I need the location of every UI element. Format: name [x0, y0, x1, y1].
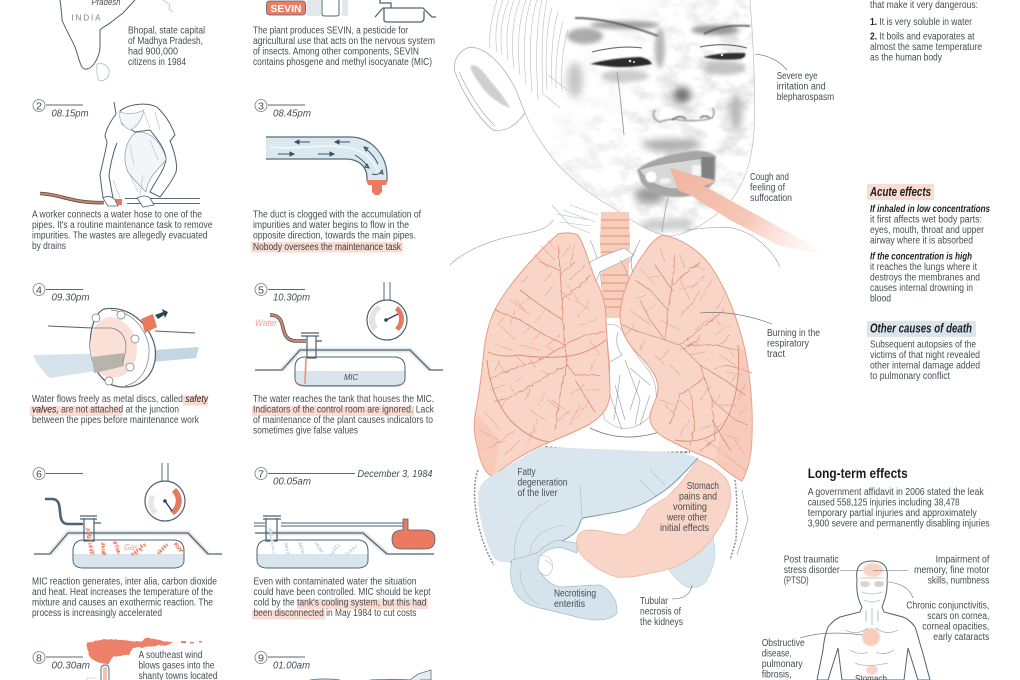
- step marker 9: 9: [258, 654, 264, 664]
- step marker 9: 01.00am: [273, 660, 310, 672]
- text: step 6: MIC reaction generates, inter alia, carbon dioxide: [32, 576, 217, 588]
- label: tubular necrosis: Tubular: [640, 596, 669, 607]
- text: high concentration: causes internal drowning in: [870, 283, 973, 294]
- text: step 5: sometimes give false values: [253, 426, 358, 436]
- text: SEVIN: of insects. Among other components, SEVIN: [253, 46, 419, 58]
- text: step 2: [32, 210, 213, 252]
- illustration: right lung (image left): [474, 233, 610, 476]
- illustration: liver: degeneration: [518, 478, 568, 488]
- text: MIC properties: almost the same temperature: [870, 42, 982, 53]
- text: high concentration: If the concentration is high: [870, 252, 972, 263]
- illustration: body outline: [310, 670, 431, 680]
- text: high concentration: blood: [870, 294, 891, 304]
- text: step 6: mixture and causes an exothermic reaction. The: [32, 598, 213, 608]
- illustration: gauge rising: [145, 463, 185, 521]
- arrow: air inhaled into the mouth: [670, 168, 830, 255]
- text: Bhopal: citizens in 1984: [128, 57, 186, 68]
- text: step 4: [30, 394, 209, 426]
- panel: step 5: [252, 282, 443, 436]
- text: affidavit: caused 558,125 injuries including 38,478: [808, 498, 960, 508]
- text: step 7: been disconnected in May 1984 to cut costs: [254, 608, 416, 619]
- illustration: child's face: [454, 0, 760, 240]
- illustration: MIC tank with water: [255, 315, 443, 386]
- panel: long-term effects: [762, 466, 990, 680]
- label: cough: [750, 172, 792, 204]
- text: MIC properties: as the human body: [870, 52, 942, 64]
- text: step 7: could have been controlled. MIC should be kept: [254, 587, 431, 598]
- text: low concentrations: If inhaled in low concentrations: [870, 204, 990, 215]
- text: Bhopal: [128, 26, 205, 68]
- step marker 7: 00.05am: [273, 476, 311, 488]
- text: step 8: A southeast wind: [138, 650, 202, 661]
- step marker 8: 00.30am: [52, 660, 90, 672]
- text: step 2: impurities. The wastes are allegedly evacuated: [32, 230, 208, 242]
- text: low concentrations: [870, 204, 990, 246]
- text: MIC properties: [870, 0, 982, 64]
- label: burning in the respiratory tract: [700, 312, 820, 360]
- text: affidavit: temporary partial injuries and approximately: [808, 508, 977, 519]
- text: SEVIN: The plant produces SEVIN, a pesticide for: [253, 26, 409, 36]
- illustration: heart: [590, 324, 665, 437]
- label: PTSD: stress disorder: [784, 565, 840, 576]
- text: step 6: process is increasingly accelerated: [32, 608, 162, 619]
- label: eye irritation: [755, 54, 834, 103]
- label: conjunctivitis: early cataracts: [933, 632, 989, 643]
- illustration: stomach: pains and: [679, 492, 717, 502]
- text: SEVIN: [253, 26, 435, 68]
- icon: SEVIN label: SEVIN: [270, 4, 302, 15]
- illustration: stomach: Stomach: [687, 481, 719, 492]
- text: step 3: The duct is clogged with the accumulation of: [253, 210, 421, 220]
- text: high concentration: destroys the membranes and: [870, 272, 980, 284]
- text: low concentrations: eyes, mouth, throat and upper: [870, 225, 985, 236]
- step marker 7: 7: [258, 470, 264, 480]
- illustration: gas cloud and chimney: [87, 638, 202, 680]
- text: step 4: valves, are not attached at the junction: [32, 404, 179, 416]
- step marker 4: [33, 284, 90, 304]
- text: step 4: between the pipes before maintenance work: [32, 415, 200, 426]
- text: Bhopal: of Madhya Pradesh,: [128, 36, 203, 47]
- label: obstructive disease: Obstructive: [762, 638, 805, 649]
- nose and mouth: [637, 108, 716, 232]
- plant tanks: [307, 0, 436, 22]
- text: low concentrations: it first affects wet body parts:: [870, 214, 982, 226]
- map of India: INDIA: [72, 14, 101, 22]
- step marker 5: [255, 284, 310, 304]
- illustration: intestine: Necrotising: [554, 588, 596, 600]
- text: SEVIN: contains phosgene and methyl isocyanate (MIC): [253, 57, 432, 68]
- illustration: gauge: [367, 282, 407, 340]
- illustration: MIC tank with water: MIC: [344, 372, 359, 382]
- panel: step 6: [32, 463, 222, 619]
- illustration: kidney: [667, 535, 715, 588]
- label: PTSD: (PTSD): [784, 575, 809, 586]
- label: cough: Cough and: [750, 172, 789, 183]
- illustration: stomach: were other: [666, 512, 708, 524]
- text: MIC properties: that make it very dangerous:: [870, 0, 978, 11]
- text: step 6: [32, 576, 217, 619]
- label: memory impairment: memory, fine motor: [914, 565, 990, 576]
- label: burning in the respiratory tract: tract: [767, 349, 785, 360]
- step marker 2: 08.15pm: [52, 108, 89, 120]
- illustration: stomach: vomiting: [673, 502, 707, 513]
- icon: SEVIN label: [266, 1, 306, 15]
- step marker 7: [255, 468, 433, 488]
- illustration: intestine: enteritis: [554, 599, 585, 610]
- illustration: liver: of the liver: [518, 488, 558, 499]
- label: tubular necrosis: the kidneys: [640, 617, 683, 628]
- text: step 4: Water flows freely as metal discs, called safety: [32, 394, 209, 405]
- hair strokes: [490, 0, 570, 108]
- label: conjunctivitis: [888, 582, 989, 643]
- text: step 5: of maintenance of the plant causes indicators to: [253, 415, 433, 426]
- illustration: ribs: [475, 447, 748, 565]
- illustration: neck and shoulders: [450, 205, 780, 290]
- step marker 4: 4: [36, 286, 42, 296]
- heading: acute effects: Acute effects: [869, 185, 931, 199]
- panel: step 9: [255, 652, 431, 680]
- illustration: trachea: [588, 212, 640, 318]
- panel: step 3: [251, 100, 421, 253]
- text: affidavit: [808, 487, 990, 530]
- heading: other causes: Other causes of death: [870, 322, 972, 336]
- label: cough: suffocation: [750, 193, 792, 204]
- text: step 2: by drains: [32, 241, 66, 252]
- panel: SEVIN plant: [253, 0, 436, 68]
- illustration: tank with gas: [34, 499, 222, 568]
- text: MIC properties: 1. It is very soluble in water: [870, 17, 973, 28]
- text: SEVIN: agricultural use that acts on the nervous system: [253, 36, 435, 47]
- text: high concentration: it reaches the lungs where it: [870, 262, 977, 273]
- panel: step 7: [252, 468, 435, 620]
- label: conjunctivitis: Chronic conjunctivitis,: [906, 601, 989, 612]
- illustration: intestine: [511, 540, 617, 620]
- text: step 3: opposite direction, towards the main pipes.: [253, 230, 416, 242]
- step marker 5: 5: [258, 286, 264, 296]
- face outline: [525, 0, 755, 236]
- text: autopsies: [870, 340, 980, 382]
- step marker 3: 3: [258, 102, 264, 112]
- text: affidavit: A government affidavit in 2006 stated the leak: [808, 487, 985, 498]
- ear: [454, 47, 525, 130]
- text: step 3: [251, 210, 421, 253]
- illustration: clogged pipe: [266, 137, 388, 195]
- panel: step 2: [32, 100, 213, 252]
- step marker 6: [33, 468, 83, 480]
- text: Bhopal: had 900,000: [128, 46, 178, 58]
- illustration: liver: [478, 447, 698, 562]
- text: step 2: A worker connects a water hose to one of the: [32, 210, 202, 220]
- step marker 2: [33, 100, 89, 120]
- step marker 3: [255, 100, 311, 120]
- text: step 7: cold by the tank's cooling system, but this had: [254, 598, 426, 608]
- text: autopsies: to pulmonary conflict: [870, 371, 950, 382]
- text: low concentrations: airway where it is absorbed: [870, 236, 973, 246]
- text: step 8: blows gases into the: [138, 660, 215, 672]
- step marker 9: [255, 652, 310, 672]
- illustration: liver: Fatty: [518, 467, 536, 478]
- illustration: left lung (image right): [620, 235, 752, 481]
- text: step 5: Indicators of the control room are ignored. Lack: [253, 404, 435, 416]
- label: tubular necrosis: necrosis of: [640, 606, 681, 618]
- label: eye irritation: blepharospasm: [777, 92, 834, 103]
- label: obstructive disease: disease,: [762, 648, 792, 660]
- label: burning in the respiratory tract: Burning in the: [767, 328, 820, 339]
- step marker 5: 10.30pm: [273, 292, 310, 304]
- text: autopsies: victims of that night revealed: [870, 350, 980, 361]
- text: Bhopal: Bhopal, state capital: [128, 26, 205, 36]
- illustration: pipe junction without safety valve: [33, 308, 199, 387]
- text: step 3: impurities and water begins to flow in the: [253, 220, 409, 231]
- label: PTSD: Post traumatic: [784, 554, 839, 565]
- panel: step 8: [33, 638, 218, 680]
- label: cough: feeling of: [750, 182, 785, 194]
- text: affidavit: 3,900 severe and permanently disabling injuries: [808, 518, 990, 530]
- step marker 8: 8: [36, 654, 42, 664]
- illustration: stomach: initial effects: [660, 523, 709, 534]
- text: high concentration: [870, 252, 980, 304]
- label: conjunctivitis: corneal opacities,: [922, 622, 989, 633]
- label: conjunctivitis: scars on cornea,: [927, 611, 989, 622]
- eyes: [590, 53, 745, 135]
- heading: long-term effects: Long-term effects: [808, 466, 908, 481]
- label: memory impairment: Impairment of: [936, 554, 989, 565]
- step marker 4: 09.30pm: [52, 292, 90, 304]
- text: autopsies: other internal damage added: [870, 360, 980, 372]
- label: obstructive disease: pulmonary: [762, 659, 803, 670]
- text: step 7: [252, 576, 431, 620]
- text: step 3: Nobody oversees the maintenance task: [253, 242, 402, 253]
- text: autopsies: Subsequent autopsies of the: [870, 340, 976, 350]
- step marker 6: 6: [36, 470, 42, 480]
- text: step 5: The water reaches the tank that houses the MIC.: [253, 394, 434, 405]
- text: step 5: [252, 394, 435, 436]
- label: tubular necrosis: [640, 585, 692, 628]
- step marker 7: December 3, 1984: [358, 468, 433, 480]
- label: memory impairment: skills, numbness: [928, 575, 989, 586]
- label: obstructive disease: [762, 633, 863, 680]
- panel: step 4: [30, 284, 209, 426]
- illustration: tank with gas: Gas: [124, 542, 139, 552]
- text: MIC properties: 2. It boils and evaporates at: [870, 32, 975, 42]
- text: step 8: [138, 650, 218, 680]
- step marker 8: [33, 652, 90, 672]
- label: memory impairment: [873, 554, 990, 586]
- text: step 7: Even with contaminated water the situation: [254, 576, 416, 588]
- panel: 1 location map: [60, 0, 205, 81]
- illustration: disconnected cooling tank: [254, 516, 435, 568]
- step marker 3: 08.45pm: [273, 108, 311, 120]
- label: eye irritation: Severe eye: [777, 71, 818, 82]
- illustration: old man: [817, 561, 930, 680]
- illustration: worker and hose: [40, 102, 200, 207]
- illustration: MIC tank with water: Water: [255, 318, 278, 329]
- label: burning in the respiratory tract: respiratory: [767, 338, 809, 350]
- illustration: stomach: [577, 460, 731, 577]
- face shading: [550, 0, 760, 240]
- step marker 2: 2: [36, 102, 42, 112]
- label: eye irritation: irritation and: [777, 82, 826, 92]
- panel: other causes of death: [867, 321, 980, 382]
- text: step 2: pipes. It's a routine maintenance task to remove: [32, 220, 213, 231]
- text: step 6: and heat. Heat increases the temperature of the: [32, 587, 213, 598]
- map of India: [60, 0, 173, 81]
- panel: acute effects: [867, 184, 990, 304]
- label: PTSD: [784, 554, 863, 586]
